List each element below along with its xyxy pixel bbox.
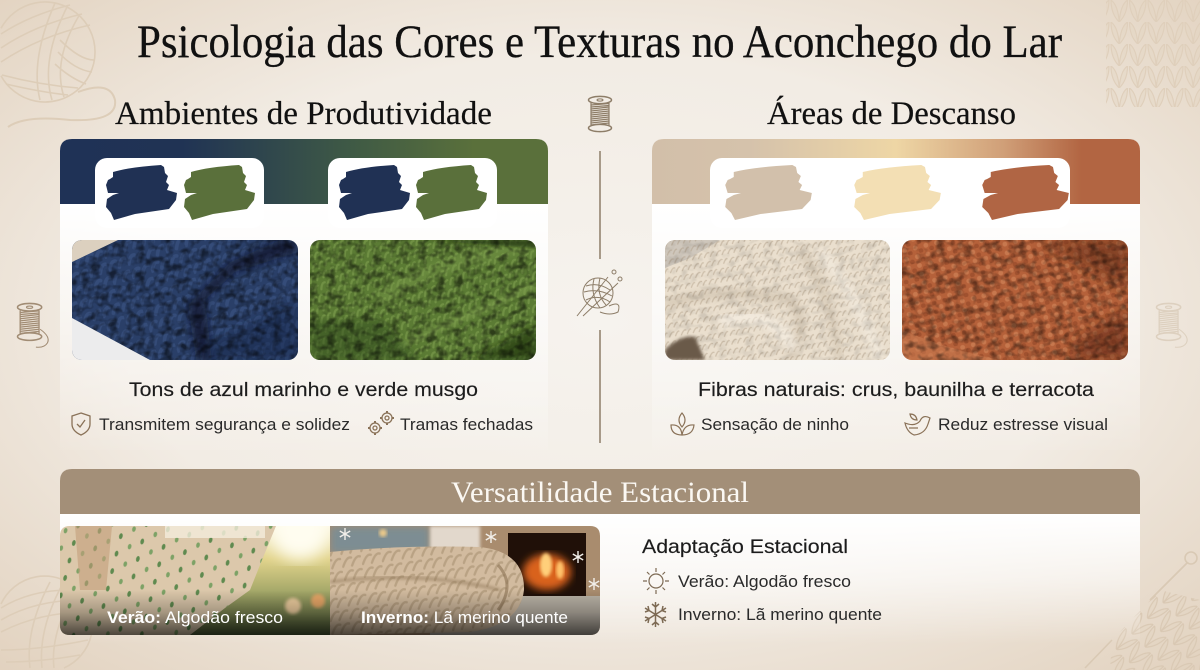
photo: summer crochet	[60, 526, 330, 635]
photo: green knit	[310, 240, 536, 360]
colour band	[652, 139, 1140, 204]
swatch card navy and green	[95, 158, 264, 228]
icon: sun	[643, 568, 669, 594]
photo: terracotta knit	[902, 240, 1128, 360]
icon: yarn and needles	[577, 270, 622, 316]
text block: adaptacao: Adaptação Estacional	[642, 536, 848, 558]
heading: Versatilidade Estacional	[451, 476, 749, 509]
decoration: knit pattern top right	[1106, 0, 1200, 107]
divider top	[599, 151, 601, 259]
icon: gears	[368, 411, 394, 435]
item: verao: Verão: Algodão fresco	[678, 572, 851, 591]
panel: versatilidade estacional	[60, 469, 1140, 644]
photo: cream crochet	[665, 240, 890, 360]
icon: bird	[905, 414, 930, 435]
heading: produtividade: Ambientes de Produtividade	[115, 96, 492, 132]
panel: produtividade	[60, 139, 548, 450]
decoration: yarn ball bottom left	[1, 576, 93, 668]
caption: verao: Verão: Algodão fresco	[107, 608, 283, 627]
benefit: seguranca: Transmitem segurança e solidez	[99, 415, 350, 434]
icon: spool	[588, 96, 612, 132]
caption: Fibras naturais: crus, baunilha e terracota	[698, 379, 1094, 401]
caption: Tons de azul marinho e verde musgo	[129, 379, 478, 401]
divider column with icons	[577, 96, 622, 443]
heading: descanso: Áreas de Descanso	[767, 95, 1016, 132]
panel background	[60, 514, 1140, 644]
swatch card navy and green second	[328, 158, 497, 228]
photo: navy knit	[72, 240, 298, 360]
panel: descanso	[652, 139, 1140, 450]
benefit: estresse: Reduz estresse visual	[938, 415, 1108, 434]
caption: inverno: Inverno: Lã merino quente	[361, 608, 568, 627]
title: Psicologia das Cores e Texturas no Aconchego do Lar	[137, 16, 1062, 68]
item: inverno: Inverno: Lã merino quente	[678, 605, 882, 624]
benefit: tramas: Tramas fechadas	[400, 415, 533, 434]
icon: leaves	[671, 413, 694, 435]
decoration: knitting needles bottom right	[1085, 552, 1200, 670]
swatch card	[710, 158, 1070, 228]
panel background	[652, 204, 1140, 450]
icon: side spool left	[18, 303, 48, 347]
icon: shield	[72, 413, 90, 435]
divider bottom	[599, 330, 601, 443]
icon: snowflake	[645, 602, 666, 627]
icon: side spool right	[1157, 303, 1187, 347]
benefit: ninho: Sensação de ninho	[701, 415, 849, 434]
photo: winter blanket	[330, 526, 600, 635]
header band	[60, 469, 1140, 514]
panel background	[60, 204, 548, 450]
colour band	[60, 139, 548, 204]
decoration: yarn ball top left	[1, 2, 115, 127]
